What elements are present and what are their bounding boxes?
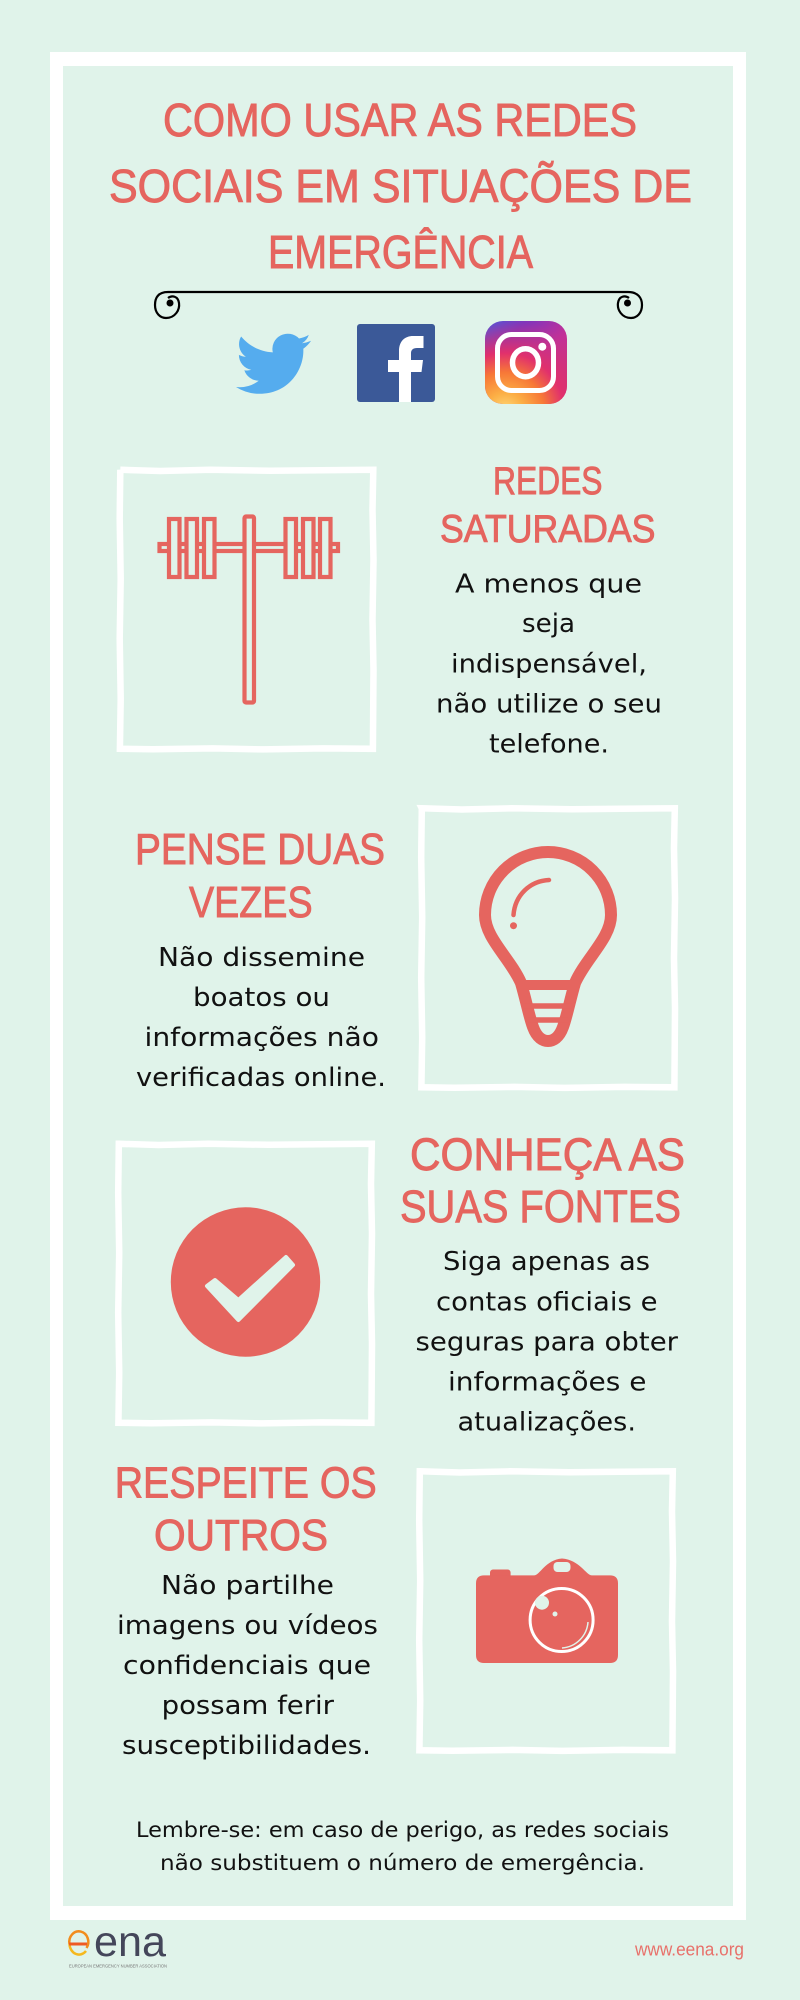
closing note: Lembre-se: em caso de perigo, as redes sociais (136, 1818, 669, 1842)
panel: redes saturadas (120, 460, 662, 760)
body text (436, 570, 662, 760)
heading (115, 1458, 377, 1560)
panel: pense duas vezes (135, 808, 675, 1093)
body text: Siga apenas as (443, 1247, 650, 1277)
body text: contas oficiais e (436, 1288, 658, 1318)
ornamental divider (155, 292, 642, 318)
body text: confidenciais que (123, 1651, 371, 1681)
heading: VEZES (189, 878, 313, 927)
body text: indispensável, (451, 650, 647, 680)
body text (136, 943, 386, 1093)
heading (400, 1129, 685, 1232)
body text: susceptibilidades. (122, 1731, 371, 1761)
body text: possam ferir (162, 1691, 334, 1721)
body text: atualizações. (458, 1408, 636, 1438)
icon frame (421, 808, 675, 1088)
icon frame (120, 470, 374, 749)
body text: informações não (144, 1023, 379, 1053)
body text: Não dissemine (158, 943, 365, 973)
icon: antenna (160, 516, 338, 702)
closing note (136, 1818, 669, 1875)
title: EMERGÊNCIA (268, 226, 533, 278)
heading: SATURADAS (440, 508, 656, 551)
icon: light bulb (485, 852, 611, 1041)
heading (135, 825, 385, 927)
heading: SUAS FONTES (400, 1181, 681, 1232)
icon: twitter (236, 334, 311, 394)
body text: boatos ou (193, 983, 330, 1013)
icon: camera (476, 1558, 618, 1663)
body text: verificadas online. (136, 1063, 386, 1093)
body text: informações e (448, 1368, 646, 1398)
logo: eena: ena (94, 1918, 166, 1966)
heading: REDES (493, 460, 602, 503)
title (109, 94, 692, 278)
panel: respeite os outros (115, 1458, 673, 1761)
body text (117, 1571, 378, 1761)
heading: PENSE DUAS (135, 825, 385, 874)
body text: não utilize o seu (436, 690, 662, 720)
title: COMO USAR AS REDES (163, 94, 637, 146)
body text: seja (522, 609, 575, 639)
title: SOCIAIS EM SITUAÇÕES DE (109, 160, 692, 212)
heading: OUTROS (154, 1511, 328, 1560)
icon frame (118, 1144, 372, 1423)
body text: telefone. (489, 730, 609, 760)
panel: conheça as suas fontes (118, 1129, 685, 1438)
logo: eena: EUROPEAN EMERGENCY NUMBER ASSOCIATION (69, 1964, 167, 1968)
body text: Não partilhe (161, 1571, 334, 1601)
heading: RESPEITE OS (115, 1458, 377, 1508)
body text: A menos que (455, 570, 642, 600)
body text: seguras para obter (416, 1328, 678, 1358)
heading: CONHEÇA AS (410, 1129, 685, 1180)
logo: eena (69, 1918, 167, 1968)
closing note: não substituem o número de emergência. (160, 1851, 645, 1875)
website url: www.eena.org (634, 1940, 744, 1960)
body text: imagens ou vídeos (117, 1611, 378, 1641)
icon: facebook (357, 324, 435, 402)
icon: check mark (171, 1207, 320, 1357)
body text (416, 1247, 678, 1438)
icon: instagram (485, 321, 567, 404)
heading (440, 460, 656, 551)
icon frame (419, 1471, 673, 1751)
